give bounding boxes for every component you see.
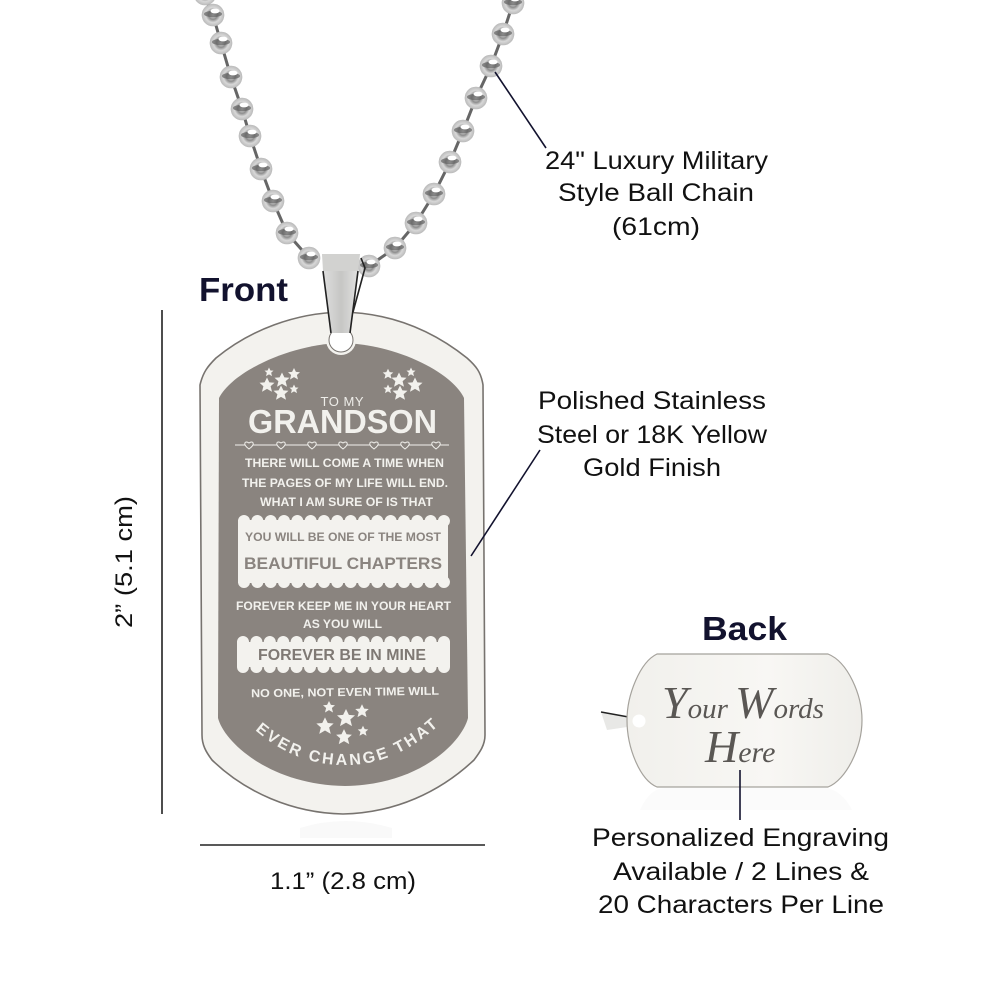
engraving: Here [704,721,775,772]
stars bottom [316,701,369,744]
callout: finish: Polished Stainless [538,387,766,415]
heading: front: Front [199,271,288,308]
scalloped box one [238,520,448,583]
hole [326,325,356,355]
back hole [632,714,646,728]
engraving [662,677,824,772]
leader: chain [495,72,546,148]
back bail [601,712,634,730]
callout: finish [537,387,768,482]
dimension: height line [161,310,163,814]
scalloped box one: BEAUTIFUL CHAPTERS [244,554,442,573]
ball chain [194,0,524,277]
forever keep lines: FOREVER KEEP ME IN YOUR HEART [236,601,451,613]
callout: chain: Style Ball Chain [558,179,754,207]
tag reflection [300,821,392,838]
bail [322,254,365,333]
message lines: THE PAGES OF MY LIFE WILL END. [242,478,448,490]
back tag reflection [640,788,852,810]
to my: TO MY [320,394,364,409]
callout: engraving: Available / 2 Lines & [613,858,869,886]
stars top right [383,368,422,400]
heading: back: Back [702,610,788,647]
dimension: height label: 2” (5.1 cm) [111,496,138,628]
no one line: NO ONE, NOT EVEN TIME WILL [251,686,439,700]
callout: engraving: 20 Characters Per Line [598,891,884,919]
scalloped box two: FOREVER BE IN MINE [258,647,426,664]
back tag body [627,654,862,787]
front dog tag [199,254,486,815]
callout: finish: Steel or 18K Yellow [537,421,768,449]
heart divider [235,442,449,449]
callout: chain [545,147,769,241]
message lines: THERE WILL COME A TIME WHEN [245,458,444,470]
dimension: width line [200,844,485,846]
tag outer body [200,312,485,814]
tag engraved panel [218,343,468,786]
dimension: width label: 1.1” (2.8 cm) [270,868,416,895]
back dog tag [601,654,862,810]
grandson title: GRANDSON [248,403,437,440]
message lines: WHAT I AM SURE OF IS THAT [260,497,433,509]
callout: finish: Gold Finish [583,454,721,482]
callout: chain: 24" Luxury Military [545,147,769,175]
stars top left [260,368,300,400]
leader: finish [471,450,540,556]
curved text [255,715,450,765]
forever keep lines [236,601,451,631]
forever keep lines: AS YOU WILL [303,619,382,631]
callout: chain: (61cm) [612,213,700,241]
leader: engraving [739,770,741,820]
callout: engraving [592,824,889,919]
callout: engraving: Personalized Engraving [592,824,889,852]
front dog tag: EVER CHANGE THAT [256,718,436,765]
scalloped box two [237,642,450,667]
scalloped box one: YOU WILL BE ONE OF THE MOST [245,530,442,544]
message lines [242,458,448,509]
engraving: Your Words [662,677,824,728]
